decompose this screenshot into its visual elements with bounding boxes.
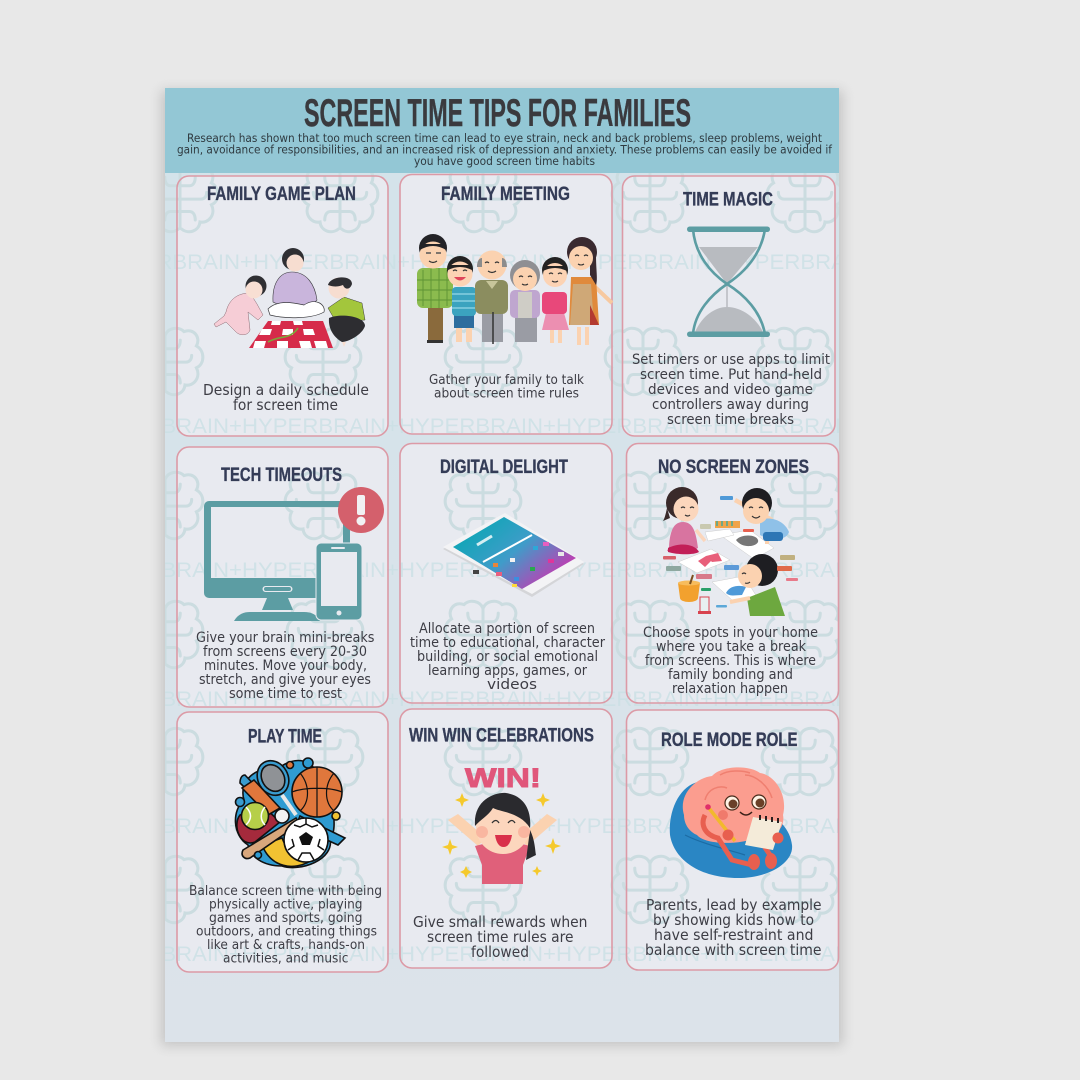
body text: minutes. Move your body, (204, 658, 367, 674)
intro text: you have good screen time habits (414, 155, 595, 168)
illustration: girl celebrating a win (442, 763, 561, 884)
body text: relaxation happen (672, 681, 788, 697)
heading: tech timeouts: TECH TIMEOUTS (221, 464, 342, 486)
header band (165, 88, 839, 173)
body text: like art & crafts, hands-on (207, 938, 365, 953)
heading: family meeting: FAMILY MEETING (441, 183, 570, 205)
heading: no screen zones: NO SCREEN ZONES (658, 456, 809, 478)
icon: monitor, phone and alert (204, 487, 384, 621)
body text: Design a daily schedule (203, 382, 369, 399)
body text (413, 914, 588, 961)
panel: digital delight (400, 444, 612, 703)
heading: role mode role: ROLE MODE ROLE (661, 729, 798, 751)
body text: for screen time (233, 397, 338, 414)
body text: from screens. This is where (645, 653, 816, 669)
intro text (177, 132, 833, 168)
panel: time magic (622, 176, 835, 436)
heading: time magic: TIME MAGIC (683, 188, 773, 210)
intro text: gain, avoidance of responsibilities, and an increased risk of depression and anxiety. These problems can easily be avoided if (177, 144, 833, 156)
body text (203, 382, 369, 414)
body text: followed (471, 944, 529, 961)
body text: about screen time rules (434, 386, 579, 402)
body text: from screens every 20-30 (203, 644, 367, 660)
body text: balance with screen time (645, 942, 822, 959)
body text: controllers away during (652, 397, 809, 413)
body text: games and sports, going (209, 911, 362, 926)
body text: where you take a break (656, 639, 807, 655)
panel: tech timeouts (177, 447, 388, 707)
body text: devices and video game (648, 382, 813, 398)
body text: time to educational, character (410, 635, 605, 651)
body text: building, or social emotional (417, 649, 598, 665)
watermark: brains and wordmark (165, 173, 839, 972)
heading: play time: PLAY TIME (248, 726, 322, 748)
illustration: family playing a board game (214, 248, 365, 348)
body text: physically active, playing (209, 898, 362, 912)
panel: family meeting (400, 174, 612, 434)
body text: Choose spots in your home (643, 625, 818, 641)
body text: Parents, lead by example (646, 897, 822, 914)
body text: stretch, and give your eyes (199, 672, 371, 688)
body text (410, 621, 605, 693)
illustration: girl celebrating a win: WIN! (465, 763, 541, 793)
body text (643, 625, 818, 697)
heading: win win celebrations: WIN WIN CELEBRATIONS (409, 724, 594, 746)
body text: learning apps, games, or (428, 663, 587, 679)
intro text: Research has shown that too much screen time can lead to eye strain, neck and back problems, sleep problems, weight (187, 132, 823, 145)
body text: outdoors, and creating things (196, 924, 377, 940)
panel: play time (177, 712, 388, 972)
panel: win win celebrations (400, 709, 612, 968)
body text: screen time breaks (667, 412, 794, 428)
body text: Allocate a portion of screen (419, 621, 595, 637)
body text: by showing kids how to (653, 912, 814, 929)
body text: screen time rules are (427, 929, 574, 946)
illustration: sports equipment (235, 755, 345, 868)
poster background (165, 88, 839, 1042)
body text (189, 884, 382, 966)
illustration: children painting (663, 487, 798, 616)
poster shadow (161, 90, 843, 1046)
panel: family game plan (177, 176, 388, 436)
illustration: brain character on a beanbag (670, 767, 792, 878)
body text: family bonding and (668, 667, 793, 683)
body text: Gather your family to talk (429, 373, 584, 388)
illustration: tablet (443, 513, 584, 597)
body text: some time to rest (229, 686, 342, 702)
heading: family game plan: FAMILY GAME PLAN (207, 183, 356, 205)
body text: videos (487, 677, 537, 693)
illustration: family of six (417, 234, 612, 345)
body text (429, 373, 584, 402)
icon: hourglass (687, 226, 770, 337)
body text (196, 630, 374, 702)
body text (632, 352, 830, 428)
body text: activities, and music (223, 952, 348, 966)
title: SCREEN TIME TIPS FOR FAMILIES (304, 92, 691, 135)
body text: Give your brain mini-breaks (196, 630, 374, 646)
body text: have self-restraint and (654, 927, 814, 944)
body text: Set timers or use apps to limit (632, 352, 830, 368)
heading: digital delight: DIGITAL DELIGHT (440, 456, 568, 478)
panel: role mode role (626, 710, 838, 970)
body text: Balance screen time with being (189, 884, 382, 899)
panel: no screen zones (626, 444, 838, 703)
body text: screen time. Put hand-held (640, 367, 822, 383)
card backgrounds (177, 174, 838, 972)
body text (645, 897, 822, 959)
body text: Give small rewards when (413, 914, 588, 931)
